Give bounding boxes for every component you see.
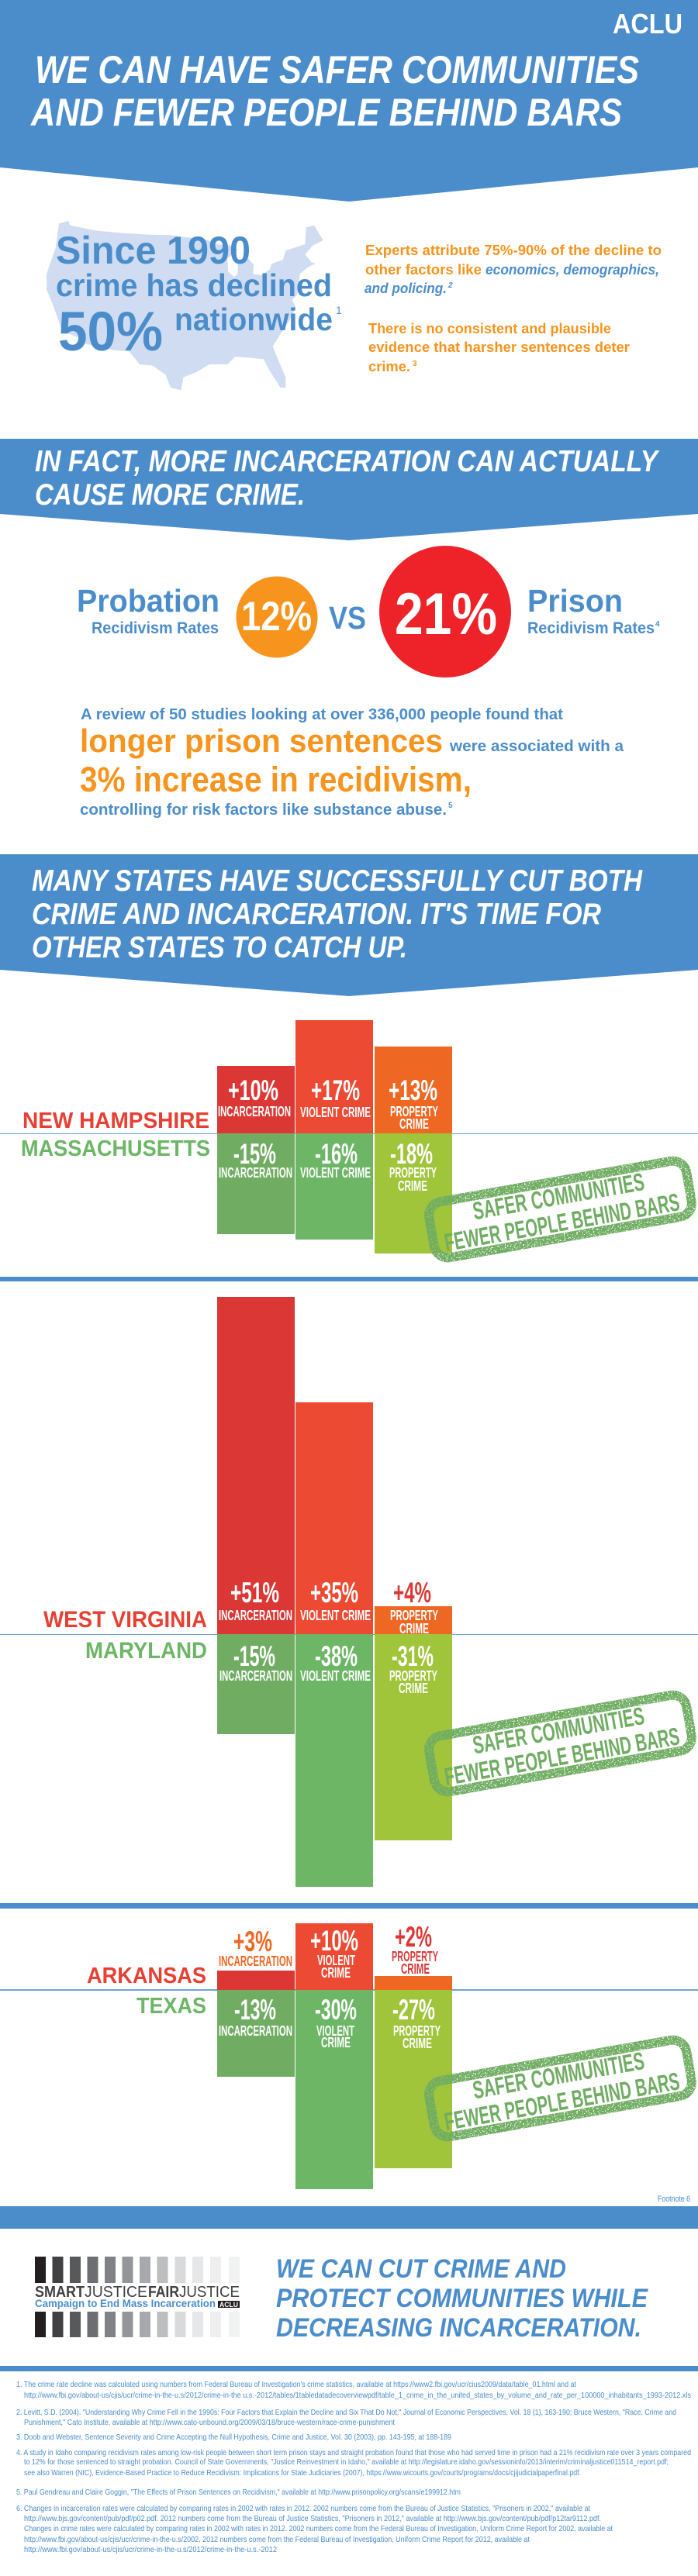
panel: section banner many states [0, 854, 698, 996]
probation label: Recidivism Rates [92, 619, 219, 637]
bar labels: decreases: -30% [315, 1994, 357, 2026]
text block: review of 50 studies: A review of 50 studies looking at over 336,000 people found that [81, 706, 563, 723]
probation label [77, 583, 219, 637]
text block: crime decline statistic [56, 229, 342, 363]
circle: 21 percent: 21% [395, 581, 497, 647]
bar labels: decreases: PROPERTY [389, 1668, 437, 1684]
bar labels: decreases: -31% [392, 1640, 434, 1672]
bar labels: decreases: PROPERTY [393, 2023, 441, 2039]
bar labels: increases: VIOLENT [317, 1953, 355, 1968]
footnote reference: Footnote 6 [658, 2195, 690, 2204]
bar labels: decreases [219, 1640, 437, 1696]
state label: Maryland: MARYLAND [85, 1638, 207, 1664]
bar chart: West Virginia vs Maryland [0, 1297, 698, 1887]
bar chart: New Hampshire vs Massachusetts [0, 1020, 698, 1254]
circle: 12 percent [236, 577, 318, 657]
panel: section banner more incarceration [0, 439, 698, 540]
text block: review of 50 studies: longer prison sentences [80, 722, 443, 759]
probation label: Probation [77, 583, 219, 619]
state label: New Hampshire: NEW HAMPSHIRE [22, 1109, 209, 1133]
text block: footnotes: see also Warren (NIC), Evidence-Based Practice to Reduce Recidivism: Implications for State Judiciaries (2007), https://www.wicourts.gov/courts/programs/docs/cjijudicialpaperfinal.pdf. [24, 2469, 581, 2478]
heading [32, 864, 643, 964]
heading: CRIME AND INCARCERATION. IT'S TIME FOR [32, 898, 601, 931]
heading [35, 445, 660, 512]
text block: footnotes: http://www.fbi.gov/about-us/cjis/ucr/crime-in-the-u.s/2002. 2012 numbers come from the Federal Bureau of Investigation, Uniform Crime Report for 2012, available at [24, 2536, 530, 2544]
bar labels: increases: CRIME [399, 1116, 429, 1132]
text block: review of 50 studies [80, 706, 624, 819]
bar labels: increases [218, 1074, 438, 1132]
bar labels: decreases: INCARCERATION [219, 1668, 292, 1684]
text block: crime decline statistic: crime has declined [56, 267, 332, 303]
text block: footnotes: http://www.fbi.gov/about-us/cjis/ucr/crime-in-the-u.s/2012/crime-in-the-u.s.-2012 [24, 2546, 277, 2554]
bar labels: increases: +10% [310, 1925, 358, 1957]
text block: crime decline statistic: nationwide [174, 302, 333, 337]
divider rule [0, 2366, 698, 2371]
text block: footnotes: Punishment," Cato Institute, available at http://www.cato-unbound.org/2009/03/18/bruce-western/race-crime-punishment [24, 2419, 395, 2427]
text block: footnotes: http://www.bjs.gov/content/pub/pdf/p02.pdf. 2012 numbers come from the Bureau of Justice Statistics, "Prisoners in 2012," available at http://www.bjs.gov/content/pub/pdf/p12tar9112.pdf. [24, 2515, 601, 2523]
icon: United States map [47, 221, 323, 390]
bar labels: decreases: VIOLENT CRIME [300, 1668, 371, 1684]
panel: recidivism comparison [77, 546, 660, 678]
bar labels: increases: PROPERTY [390, 1104, 438, 1119]
bar labels: increases: CRIME [399, 1621, 429, 1636]
bar labels: decreases: -15% [233, 1640, 275, 1672]
bar labels: decreases: -15% [233, 1138, 276, 1170]
bar labels: increases: VIOLENT CRIME [300, 1105, 371, 1120]
bar labels: decreases: -38% [315, 1640, 358, 1672]
text block: experts attribute [365, 243, 662, 296]
bar labels: increases: +4% [393, 1577, 431, 1609]
bar labels: increases: INCARCERATION [219, 1954, 292, 1969]
circle: 12 percent: 12% [241, 594, 312, 640]
bar labels: decreases: CRIME [403, 2036, 432, 2051]
prison label: Prison [527, 583, 623, 619]
bar labels: increases: +35% [310, 1577, 358, 1609]
text block: experts attribute: economics, demographics, [485, 262, 659, 278]
text block: footnotes [16, 2381, 691, 2554]
ACLU wordmark: ACLU [613, 8, 682, 40]
bar labels: decreases: PROPERTY [389, 1165, 437, 1181]
bar labels: decreases: CRIME [399, 1681, 428, 1696]
text block: review of 50 studies: controlling for risk factors like substance abuse. [80, 802, 447, 819]
bar labels: decreases: -16% [315, 1138, 358, 1170]
bar labels: decreases [219, 1994, 441, 2051]
closing statement: DECREASING INCARCERATION. [276, 2313, 641, 2343]
text block: experts attribute: 2 [447, 281, 453, 290]
bar labels: decreases: VIOLENT CRIME [300, 1165, 371, 1181]
title [29, 48, 639, 134]
prison label [527, 583, 660, 637]
bar labels: increases: +2% [395, 1921, 432, 1953]
band above closing [0, 2206, 698, 2229]
bar labels: decreases: CRIME [398, 1178, 427, 1194]
prison label: 4 [655, 620, 660, 629]
bar chart: Arkansas vs Texas [0, 1921, 698, 2189]
panel: header banner [0, 0, 698, 202]
text block: experts attribute: other factors like [365, 262, 482, 278]
text block: review of 50 studies: 3% increase in recidivism, [80, 760, 472, 799]
closing statement: WE CAN CUT CRIME AND [276, 2254, 566, 2284]
title: AND FEWER PEOPLE BEHIND BARS [29, 91, 622, 134]
logo: Smart Justice Fair Justice: Campaign to End Mass Incarceration [35, 2298, 216, 2309]
heading: OTHER STATES TO CATCH UP. [32, 931, 407, 964]
vs label: VS [329, 600, 366, 636]
divider rule [0, 1277, 698, 1281]
logo: Smart Justice Fair Justice: FAIR [148, 2284, 179, 2301]
bar labels: increases: +51% [230, 1577, 279, 1609]
bar labels: increases: +3% [233, 1926, 272, 1957]
bar labels: increases: CRIME [321, 1965, 351, 1981]
bar labels: increases [219, 1921, 438, 1981]
closing statement: PROTECT COMMUNITIES WHILE [276, 2284, 648, 2313]
circle: 21 percent [379, 546, 511, 678]
logo: Smart Justice Fair Justice: ACLU [219, 2301, 238, 2309]
closing statement [276, 2254, 648, 2343]
divider rule [0, 1903, 698, 1909]
text block: experts attribute: and policing. [365, 281, 447, 296]
text block: no evidence harsher sentences deter crime: There is no consistent and plausible [368, 321, 611, 336]
text block: footnotes: 5. Paul Gendreau and Claire Goggin, "The Effects of Prison Sentences on Recidivism," available at http://www.prisonpolicy.org/scans/e199912.htm [16, 2488, 461, 2497]
bar labels: decreases: -13% [234, 1994, 276, 2026]
state label: West Virginia: WEST VIRGINIA [43, 1607, 207, 1633]
bar labels: increases: +13% [389, 1074, 437, 1106]
text block: crime decline statistic: Since 1990 [56, 229, 251, 272]
bar labels: increases: INCARCERATION [218, 1104, 291, 1119]
heading: CAUSE MORE CRIME. [35, 478, 305, 512]
bar labels: increases: +10% [228, 1074, 278, 1106]
text block: crime decline statistic: 1 [336, 304, 342, 316]
bar labels: decreases: -27% [392, 1994, 435, 2026]
text block: no evidence harsher sentences deter crime [368, 321, 630, 374]
text block: no evidence harsher sentences deter crime: 3 [413, 360, 417, 368]
logo: Smart Justice Fair Justice [35, 2257, 240, 2337]
text block: no evidence harsher sentences deter crime: crime. [368, 359, 410, 374]
bar labels: decreases [219, 1138, 437, 1194]
state label: Arkansas: ARKANSAS [87, 1964, 206, 1988]
bar labels: decreases: -18% [390, 1138, 433, 1170]
state label: Massachusetts: MASSACHUSETTS [21, 1136, 210, 1161]
logo: Smart Justice Fair Justice: JUSTICE [85, 2284, 147, 2301]
bar labels: decreases: INCARCERATION [219, 2023, 292, 2039]
bar labels: decreases: CRIME [321, 2035, 351, 2050]
prison label: Recidivism Rates [527, 619, 655, 637]
state label: Texas: TEXAS [136, 1994, 206, 2019]
logo: Smart Justice Fair Justice: SMART [35, 2284, 85, 2301]
text block: crime decline statistic: 50% [58, 302, 163, 363]
text block: experts attribute: Experts attribute 75%-90% of the decline to [365, 243, 662, 258]
text block: footnotes: 6. Changes in incarceration rates were calculated by comparing rates in 2002 with rates in 2012. 2002 numbers come from the Bureau of Justice Statistics, "Prisoners in 2002," available at [16, 2505, 590, 2513]
bar labels: increases: CRIME [401, 1961, 430, 1977]
bar labels: decreases: VIOLENT [316, 2023, 354, 2039]
bar labels: increases [219, 1577, 438, 1636]
text block: review of 50 studies: 5 [448, 802, 453, 810]
text block: review of 50 studies: were associated with a [449, 738, 624, 755]
bar labels: increases: +17% [311, 1074, 360, 1106]
text block: no evidence harsher sentences deter crime: evidence that harsher sentences deter [368, 340, 630, 355]
text block: footnotes: Changes in crime rates were calculated by comparing rates in 2002 with rates in 2012. 2002 numbers come from the Federal Bureau of Investigation, Uniform Crime Report for 2002, available at [24, 2525, 613, 2533]
bar labels: increases: INCARCERATION [219, 1608, 292, 1623]
text block: footnotes: 3. Doob and Webster, Sentence Severity and Crime Accepting the Null Hypothesis, Crime and Justice, Vol. 30 (2003), pp. 143-195, at 188-189 [16, 2433, 451, 2442]
bar labels: increases: PROPERTY [390, 1608, 438, 1623]
bar labels: increases: VIOLENT CRIME [300, 1608, 371, 1623]
bar labels: decreases: INCARCERATION [219, 1165, 292, 1181]
text block: footnotes: 1. The crime rate decline was calculated using numbers from Federal Bureau of Investigation's crime statistics, available at https://www2.fbi.gov/ucr/cius2009/data/table_01.html and at [16, 2381, 576, 2389]
bar labels: increases: PROPERTY [392, 1949, 438, 1964]
logo: Smart Justice Fair Justice: JUSTICE [179, 2284, 240, 2301]
